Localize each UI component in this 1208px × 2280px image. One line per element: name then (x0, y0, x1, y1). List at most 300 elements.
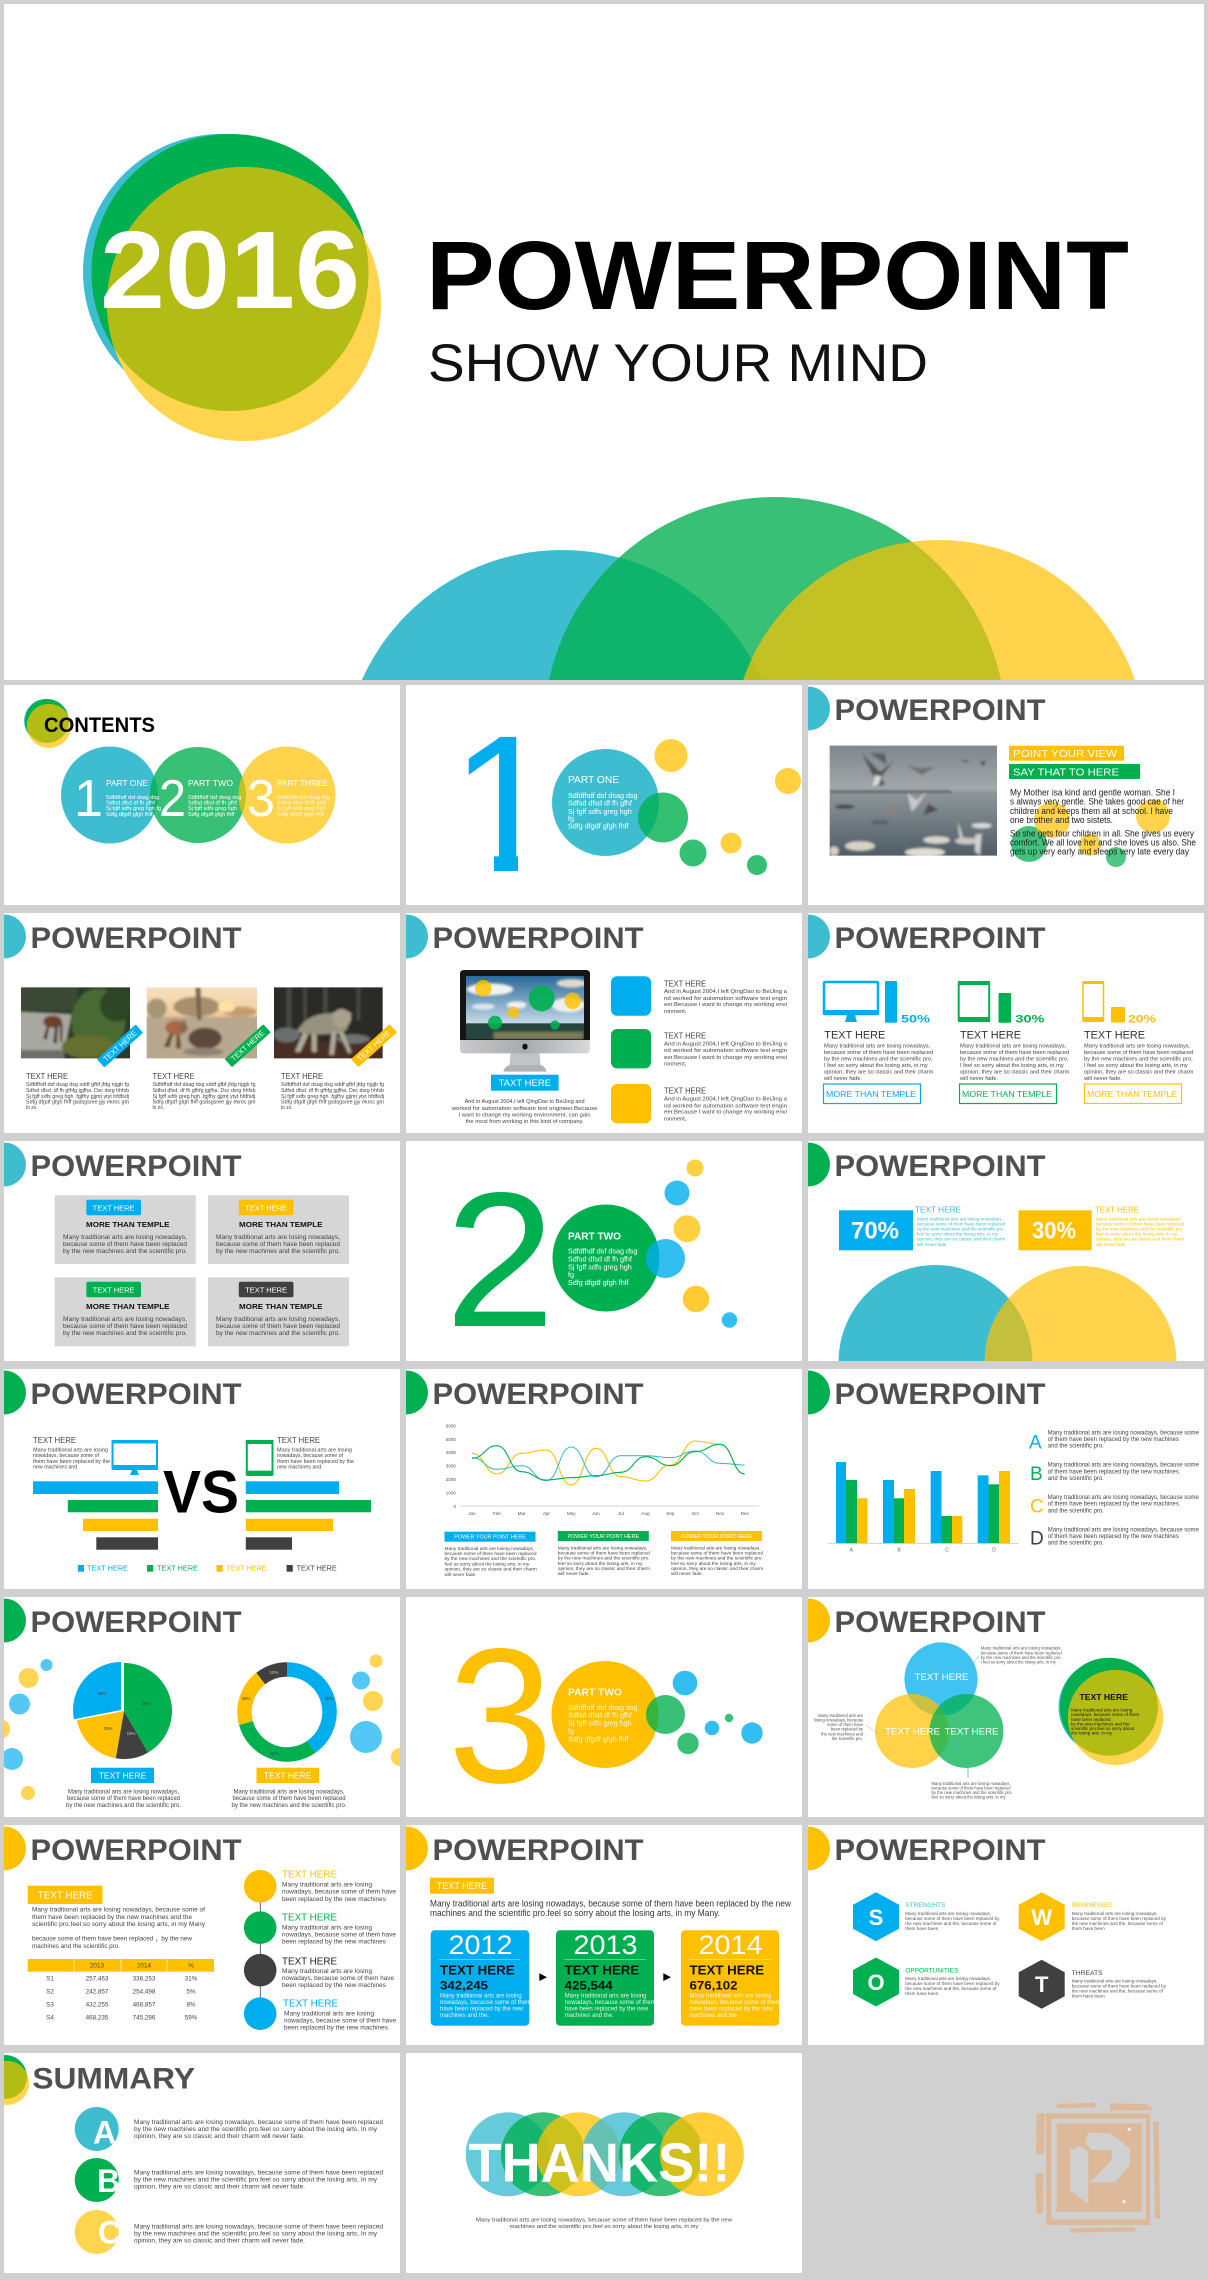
chart: pie: 25% (142, 1701, 150, 1706)
diagram: venn: TEXT HERE (944, 1726, 998, 1737)
text: list items: And in August 2004,I left QingDao to BeiJing a (664, 1097, 788, 1103)
chart: donut: 30% (270, 1751, 278, 1756)
buttons: more than temple: MORE THAN TEMPLE (1087, 1090, 1177, 1099)
text: part two (568, 1231, 638, 1287)
list: A: and the scientific pro. (1048, 1443, 1104, 1450)
item: B: opinion, they are so classic and their charm will never fade. (134, 2184, 305, 2191)
text: part one: PART ONE (568, 774, 619, 786)
text: intro: Many traditional arts are losing nowadays, because some of them have been replaced by the new (430, 1899, 791, 1909)
table: S3 (46, 2002, 54, 2009)
text: 30% description: TEXT HERE (1095, 1204, 1139, 1214)
swot: weaknesses: WEAKNESSES (1072, 1902, 1112, 1909)
heading: 2016: 2016 (100, 209, 360, 332)
ribbon tags: TEXT HERE (101, 1029, 139, 1063)
text: 30% description: by the new machines and the scientific pro. (1096, 1227, 1184, 1232)
chart: grouped bars (828, 1462, 1018, 1553)
text: column one (823, 1029, 934, 1082)
item: A: opinion, they are so classic and their charm will never fade. (134, 2133, 305, 2140)
timeline: circles (244, 1870, 276, 2030)
card: 2013: Many traditional arts are losing (565, 1993, 646, 1999)
text: intro: machines and the scientific pro.feel so sorry about the losing arts, in my Many. (430, 1908, 720, 1918)
text: paragraphs: one brother and two sistets. (1010, 815, 1113, 825)
panel: versus slide (0, 1369, 400, 1589)
badge: point your view (1009, 746, 1124, 761)
swot: strengths: S (869, 1905, 883, 1930)
corner circle (808, 686, 830, 730)
text: timeline items: been replaced by the new machines (282, 1896, 387, 1903)
text: part three: Sdfdfhdf dsf dsag dsg (568, 1703, 638, 1712)
text: timeline items: nowadays, because some of them have (284, 2018, 396, 2025)
stat: 30% (1018, 1210, 1092, 1250)
text: timeline items: TEXT HERE (282, 1912, 337, 1923)
numeral: 3: 3 (448, 1608, 553, 1823)
text: left description: Many traditional arts are losing (33, 1447, 108, 1453)
circles: three parts: Sdfg dfgdf gfgh fhff (106, 812, 153, 818)
list: D: and the scientific pro. (1048, 1540, 1104, 1547)
note: left: the scientific pro. (832, 1736, 863, 1741)
text: captions: Sdfdfhdf dsf dsag dsg sddf gfbf jfdg njgjb fg (152, 1082, 256, 1088)
table: 8% (186, 2002, 196, 2009)
icon: phone 20%: 20% (1128, 1014, 1156, 1026)
text: part one: Sdfg dfgdf gfgh fhff (568, 822, 629, 830)
swot: opportunities: the new machines and the, because some of (905, 1986, 997, 1991)
note: top right: by the new machines and the scientific pro. (981, 1655, 1062, 1660)
callout: yellow column: POWER YOUR POINT HERE (681, 1534, 753, 1540)
panel: contents slide (4, 685, 400, 905)
panel: line chart slide (384, 1369, 802, 1589)
table: S4 (46, 2015, 54, 2022)
title: POWERPOINT (30, 1150, 242, 1183)
title: POWERPOINT (834, 694, 1046, 727)
text: pie caption: Many traditional arts are losing nowadays, (68, 1789, 179, 1796)
text: intro: Many traditional arts are losing nowadays, because some of (32, 1907, 205, 1914)
card: 2012: Many traditional arts are losing (440, 1993, 522, 1999)
text: timeline items: Many traditional arts are losing (282, 1924, 372, 1931)
note: left: the new machines and (821, 1731, 864, 1736)
text: intro: them have been replaced by the new machines and the (32, 1914, 192, 1921)
corner circle (0, 1142, 26, 1186)
text: caption: And in August 2004,I left QingDao to BeiJing and (465, 1099, 585, 1105)
text: 30% description: because some of them have been replaced (1096, 1222, 1185, 1227)
card: blue (55, 1195, 196, 1264)
text: timeline items: nowadays, because some of them have (282, 1975, 394, 1982)
note: bottom (932, 1768, 1012, 1799)
title: POWERPOINT (834, 1378, 1046, 1411)
corner circle (0, 1598, 26, 1642)
item: C (75, 2210, 383, 2254)
chart: donut: 40% (325, 1696, 333, 1701)
text: column one: because some of them have been replaced (824, 1050, 933, 1056)
badge: point your view: POINT YOUR VIEW (1013, 749, 1118, 760)
chart: line chart: 1000 (446, 1490, 456, 1496)
text: part three (568, 1686, 638, 1743)
card: yellow: by the new machines and the scientific pro. (216, 1248, 340, 1255)
card: green: MORE THAN TEMPLE (86, 1302, 170, 1311)
list: B (1030, 1462, 1199, 1485)
text: 30% description (1095, 1204, 1185, 1247)
list: C: of them have been replaced by the new machines (1048, 1501, 1179, 1508)
chart: line chart: Dec (741, 1511, 750, 1516)
legend: TEXT HERE (157, 1564, 198, 1573)
swot: opportunities: O (867, 1970, 885, 1995)
text: 30% description: will never fade. (1096, 1242, 1127, 1247)
corner circle (808, 914, 830, 958)
text: right description: Many traditional arts are losing (277, 1447, 352, 1453)
text: timeline items: been replaced by the new machines (282, 1982, 387, 1989)
text: left description: TEXT HERE (33, 1435, 76, 1445)
text: column three (1083, 1029, 1194, 1082)
card: blue: MORE THAN TEMPLE (86, 1220, 170, 1229)
table: S1 (46, 1976, 54, 1983)
heading: VS: VS (163, 1458, 239, 1526)
note: left (814, 1713, 878, 1741)
text: captions: Sj fgff sdfs greg hgh .fgjfhy gjjmt ytyt hfdfsdj (152, 1094, 256, 1100)
callout: blue column: will never fade. (444, 1572, 476, 1578)
chart: line chart: May (567, 1511, 576, 1516)
callout: blue column: POWER YOUR POINT HERE (454, 1535, 526, 1541)
title: POWERPOINT (30, 1834, 242, 1867)
chart: left bars (33, 1481, 158, 1550)
item: B: by the new machines and the scientific pro.feel so sorry about the losing arts, In my (134, 2177, 378, 2184)
note: left: Many traditional arts are (818, 1713, 864, 1718)
text: paragraphs: children and keeps them all at school. I have (1010, 806, 1173, 816)
table: 468,235 (86, 2015, 109, 2022)
text: column one: opinion, they are so classic and their charm (824, 1070, 934, 1076)
card: 2012: 2012 (448, 1930, 512, 1960)
chart: line chart: Feb (493, 1511, 501, 1516)
icon: logo circles with text: the losing arts, in my (1071, 1731, 1113, 1736)
text: captions: Sj fgff sdfs greg hgh .fgjfhy gjjmt ytyt hfdfsdj (26, 1094, 129, 1100)
chart: line chart: Oct (692, 1511, 699, 1516)
text: captions: Sdfg dfgdf gfgh fhff gsdsgsree jjjy ekroc gm (281, 1100, 384, 1106)
legend: TEXT HERE (226, 1564, 266, 1573)
callout: yellow column: Many traditional arts are losing nowadays, (671, 1546, 761, 1552)
note: bottom: feel so sorry about the losing arts, in my (932, 1794, 1006, 1799)
text: column two: TEXT HERE (960, 1029, 1021, 1041)
list: C (1030, 1494, 1199, 1517)
text: column three: Many traditional arts are losing nowadays, (1084, 1043, 1191, 1049)
circles: three parts: Sdfsd dfsd df fh gfhf (188, 801, 237, 807)
text: list items: TEXT HERE (664, 1031, 706, 1041)
corner circle (406, 914, 428, 958)
text: 30% description: opinion, they are so classic and their charm (1096, 1237, 1185, 1242)
text: column three: will never fade. (1083, 1076, 1122, 1082)
corner circle (384, 1370, 428, 1414)
text: 30% description: feel so sorry about the losing arts, in my (1096, 1232, 1178, 1237)
chart: line chart (446, 1424, 759, 1516)
panel: 70 / 30 slide (786, 1141, 1204, 1459)
swot: threats: because some of them have been replaced by (1072, 1984, 1167, 1988)
title: POWERPOINT (834, 1606, 1046, 1639)
swot: opportunities: because some of them have been replaced by (905, 1981, 1000, 1986)
callout: yellow column: by the new machines and the scientific pro. (671, 1556, 763, 1562)
text: donut caption: because some of them have been replaced (232, 1795, 346, 1802)
swot: threats: Many traditional arts are losing nowadays, (1072, 1978, 1157, 1984)
card: green: because some of them have been replaced (63, 1323, 187, 1330)
circles: three parts: Sj fgff sdfs greg hgh (188, 806, 237, 812)
list: B: and the scientific pro. (1048, 1475, 1104, 1482)
list: D: Many traditional arts are losing nowadays, because some (1048, 1526, 1199, 1533)
chart: donut: 10% (270, 1670, 278, 1675)
badge: pie label (91, 1768, 154, 1783)
card: dark (208, 1277, 349, 1346)
text: caption: I want to change my working environment, can gain (459, 1112, 591, 1118)
badge: taxt here (491, 1075, 559, 1091)
icon: tablet 30%: 30% (1015, 1014, 1045, 1026)
table: 59% (185, 2015, 198, 2022)
card: 2014: machines and the. (690, 2013, 739, 2019)
badge: donut label: TEXT HERE (264, 1770, 312, 1780)
background bubbles (1011, 799, 1170, 867)
callout: green column: because some of them have been replaced (558, 1550, 650, 1556)
callout: green column: Many traditional arts are losing nowadays, (558, 1546, 647, 1552)
icon: monitor 50%: 50% (901, 1014, 930, 1026)
badge: taxt here: TAXT HERE (499, 1078, 551, 1089)
text: captions: Sdfsd dfsd. df fh gfhfg jgjfha. Dsc dsrg hhfsb (26, 1088, 129, 1094)
ribbon tags (97, 1024, 397, 1067)
card: 2014: nowadays, because some of them (690, 2000, 781, 2006)
callout: green column: by the new machines and the scientific pro. (558, 1556, 650, 1562)
text: part three: Sdfg dfgdf gfgh fhff (568, 1734, 629, 1743)
text: part two: Sj fgff sdfs greg hgh (568, 1263, 632, 1272)
callout: green column (558, 1531, 650, 1577)
bubbles (552, 1160, 737, 1328)
card: 2013: TEXT HERE (565, 1962, 640, 1977)
icon: logo circles with text: nowadays, because some of them (1071, 1712, 1140, 1717)
icon: small logo (24, 699, 71, 748)
text: intro: machines and the scientific pro. (32, 1943, 120, 1950)
title: POWERPOINT (432, 1834, 644, 1867)
text: part two: Sdfsd dfsd df fh gfhf (568, 1254, 632, 1263)
title: POWERPOINT (432, 1378, 644, 1411)
swot: weaknesses: W (1031, 1905, 1052, 1930)
text: list items: nd worked for automation software test engin (664, 1048, 787, 1054)
text: 70% description: opinion, they are so classic and their charm (917, 1237, 1006, 1242)
panel: four gray cards slide (0, 1141, 400, 1361)
card: blue: by the new machines and the scientific pro. (63, 1248, 187, 1255)
text: 70% description: will never fade. (917, 1242, 948, 1247)
text: column two (959, 1029, 1070, 1082)
panel: part three divider (406, 1597, 802, 1823)
corner circle (786, 1598, 830, 1642)
panel: thanks slide (406, 2053, 802, 2273)
table: 5% (186, 1989, 196, 1996)
text: captions (26, 1073, 384, 1109)
buttons: more than temple: MORE THAN TEMPLE (826, 1090, 916, 1099)
chart: pie (73, 1662, 172, 1759)
text: part two: Sdfg dfgdf gfgh fhff (568, 1278, 629, 1287)
badge: say that to here: SAY THAT TO HERE (1013, 768, 1119, 778)
corner circle (0, 1370, 26, 1414)
callout: blue column: because some of them have been replaced (444, 1551, 537, 1557)
card: green (55, 1277, 196, 1346)
text: list items: TEXT HERE (664, 979, 706, 989)
card: 2013: have been replaced by the new (565, 2007, 649, 2013)
card: yellow: because some of them have been replaced (216, 1241, 340, 1248)
text: column three: because some of them have been replaced (1084, 1050, 1193, 1056)
title: POWERPOINT (30, 1606, 242, 1639)
title: POWERPOINT (834, 1150, 1046, 1183)
text: column one: Many traditional arts are losing nowadays, (824, 1043, 931, 1049)
item: C: opinion, they are so classic and their charm will never fade. (134, 2237, 305, 2244)
text: column two: opinion, they are so classic and their charm (960, 1070, 1070, 1076)
title: POWERPOINT (834, 1834, 1046, 1867)
text: column one: I feel so sorry about the losing arts, in my (824, 1063, 928, 1069)
card: yellow: MORE THAN TEMPLE (239, 1220, 322, 1229)
list: B: of them have been replaced by the new machines (1048, 1468, 1179, 1475)
badge: say that to here (1009, 764, 1140, 779)
chart: right bars (246, 1481, 371, 1550)
corner circle (786, 1370, 830, 1414)
panel: device percentages slide (786, 913, 1204, 1133)
swot: strengths (853, 1892, 1000, 1941)
arrow (539, 1973, 547, 1981)
diagram: two overlapping domes (838, 1265, 1176, 1459)
chart: line chart: Jul (618, 1511, 624, 1516)
callout: green column: will never fade. (558, 1571, 590, 1577)
list: D: D (1030, 1529, 1044, 1550)
text: column three: I feel so sorry about the losing arts, in my (1084, 1063, 1188, 1069)
arrow (663, 1973, 671, 1981)
card: 2012 (431, 1930, 531, 2026)
circles: three parts: PART THREE (277, 778, 328, 788)
text: closing note: machines and the scientific pro.feel so sorry about the losing arts, in my (510, 2224, 699, 2230)
text: 70% description: feel so sorry about the losing arts, in my (917, 1232, 999, 1237)
stat: 70% (839, 1210, 913, 1250)
subtitle: SHOW YOUR MIND (428, 334, 928, 393)
text: timeline items: been replaced by the new machines (282, 1938, 387, 1945)
text: column two: I feel so sorry about the losing arts, in my (960, 1063, 1064, 1069)
heading: contents: CONTENTS (44, 714, 155, 737)
card: dark: MORE THAN TEMPLE (239, 1302, 322, 1311)
chart: pie: 30% (104, 1726, 112, 1731)
bubbles (552, 1661, 763, 1768)
ribbon tags: TEXT HERE (229, 1028, 266, 1063)
note: bottom: by the new machines and the scientific pro. (932, 1790, 1012, 1795)
text: right description: nowadays, because some of (277, 1453, 344, 1459)
text: part one: Sj fgff sdfs greg hgh (568, 807, 632, 816)
circles: three parts: Sdfdfhdf dsf dsag dsg (188, 795, 241, 801)
legend: TEXT HERE (87, 1564, 128, 1573)
text: timeline items: nowadays, because some of them have (282, 1931, 396, 1938)
list: C: C (1030, 1496, 1044, 1517)
text: 70% description: by the new machines and the scientific pro. (917, 1227, 1005, 1232)
callout: blue column: feel so sorry about the losing arts, in my (444, 1561, 530, 1567)
text: list items: ronment, (664, 1061, 687, 1067)
card: 2013: 425,544 (565, 1979, 613, 1993)
table: 254,498 (133, 1989, 156, 1996)
table: S2 (46, 1989, 54, 1996)
circles: three parts: 3 (247, 770, 275, 828)
panel: imac slide (384, 913, 802, 1133)
panel: pie and donut slide (0, 1597, 409, 1817)
text: part three: fg (568, 1726, 574, 1735)
icon: overlapping logo circles (83, 134, 381, 441)
icon: monitor (112, 1440, 158, 1475)
text: column two: because some of them have been replaced (960, 1050, 1069, 1056)
icon: tablet 30% (958, 981, 1045, 1026)
text: part two: fg (568, 1270, 574, 1279)
panel: three photos slide (0, 913, 400, 1133)
list: B: B (1030, 1464, 1043, 1485)
chart: grouped bars: C (945, 1547, 949, 1553)
corner circle (786, 1826, 830, 1870)
badge: text here (430, 1878, 494, 1894)
text: list items: ronment, (664, 1116, 687, 1122)
heading: thanks: THANKS!! (468, 2132, 730, 2194)
title: POWERPOINT (30, 922, 242, 955)
chart: donut (242, 1670, 333, 1756)
swot: weaknesses: them have been (1072, 1926, 1105, 1931)
text: paragraphs (1010, 788, 1196, 856)
text: captions: lo zx. (281, 1105, 293, 1111)
chart: pie: 10% (127, 1731, 135, 1736)
list: D (1030, 1526, 1199, 1550)
text: part three: Sdfsd dfsd df fh gfhf (568, 1711, 632, 1720)
swot: threats (1019, 1960, 1167, 2009)
panel: table and timeline slide (0, 1825, 400, 2045)
text: captions: Sdfsd dfsd. df fh gfhfg jgjfha. Dsc dsrg hhfsb (152, 1088, 256, 1094)
swot: strengths: Many traditional arts are losing nowadays, (905, 1911, 991, 1916)
card: 2014: TEXT HERE (690, 1962, 764, 1977)
text: captions: lo zx. (152, 1105, 164, 1111)
text: 70% description (915, 1204, 1006, 1247)
text: 70% description: because some of them have been replaced (917, 1222, 1006, 1227)
stat: 70%: 70% (851, 1217, 899, 1244)
item: C: Many traditional arts are losing nowadays, because some of them have been replaced (134, 2223, 383, 2230)
text: captions: Sdfdfhdf dsf dsag dsg sddf gfbf jfdg njgjb fg (26, 1082, 129, 1088)
note: bottom: Many traditional arts are losing nowadays, (932, 1781, 1010, 1786)
icon: monitor 50% (823, 981, 930, 1026)
card: yellow: Many traditional arts are losing nowadays, (216, 1234, 340, 1241)
icon: logo circles with text: Many traditional arts are losing (1071, 1708, 1133, 1713)
note: top right: because some of them have been replaced (981, 1650, 1062, 1655)
swot: opportunities (853, 1958, 1000, 2006)
circles: three parts: Sj fgff sdfs greg hgh (277, 806, 326, 812)
title: summary: SUMMARY (32, 2062, 195, 2095)
text: column two: by the new machines and the scientific pro, (960, 1057, 1069, 1063)
text: paragraphs: My Mother isa kind and gentle woman. She I (1010, 788, 1175, 798)
text: timeline items: Many traditional arts are losing (282, 1882, 372, 1889)
swot: weaknesses: Many traditional arts are losing nowadays, (1072, 1911, 1157, 1916)
chart: pie: 35% (98, 1691, 106, 1696)
swot: opportunities: Many traditional arts are losing nowadays, (905, 1976, 991, 1981)
swot: strengths: them have been (905, 1926, 939, 1931)
swot: weaknesses: the new machines and the, because some of (1072, 1921, 1164, 1926)
text: list items: nd worked for automation software test engin (664, 996, 787, 1002)
icon: logo circles with text: TEXT HERE (1079, 1692, 1128, 1702)
chart: line chart: Nov (716, 1511, 725, 1516)
chart: line chart: Aug (642, 1511, 650, 1516)
table: 2013 (90, 1962, 104, 1970)
icon: tablet (246, 1440, 274, 1476)
circles: three parts: Sdfg dfgdf gfgh fhff (188, 812, 235, 818)
card: 2012: nowadays, because some of them (440, 2000, 531, 2006)
text: list items: eer.Because I want to change my working envi (664, 1110, 787, 1116)
callout: blue column: by the new machines and the scientific pro. (444, 1556, 536, 1562)
swot: threats: them have been (1072, 1994, 1105, 1998)
text: intro: because some of them have been replaced ，by the new (32, 1936, 192, 1943)
swot: strengths: the new machines and the, because some of (905, 1921, 997, 1926)
chart: line chart: Sep (666, 1511, 675, 1516)
text: closing note: Many traditional arts are losing nowadays, because some of them have been replaced by the new (476, 2217, 733, 2223)
table: 468,857 (133, 2002, 156, 2009)
text: column one: will never fade. (823, 1076, 862, 1082)
card: 2012: machines and the. (440, 2013, 489, 2019)
text: list items: eer.Because I want to change my working envi (664, 1055, 787, 1061)
text: 70% description: TEXT HERE (915, 1204, 961, 1214)
item: B: B (97, 2163, 120, 2199)
